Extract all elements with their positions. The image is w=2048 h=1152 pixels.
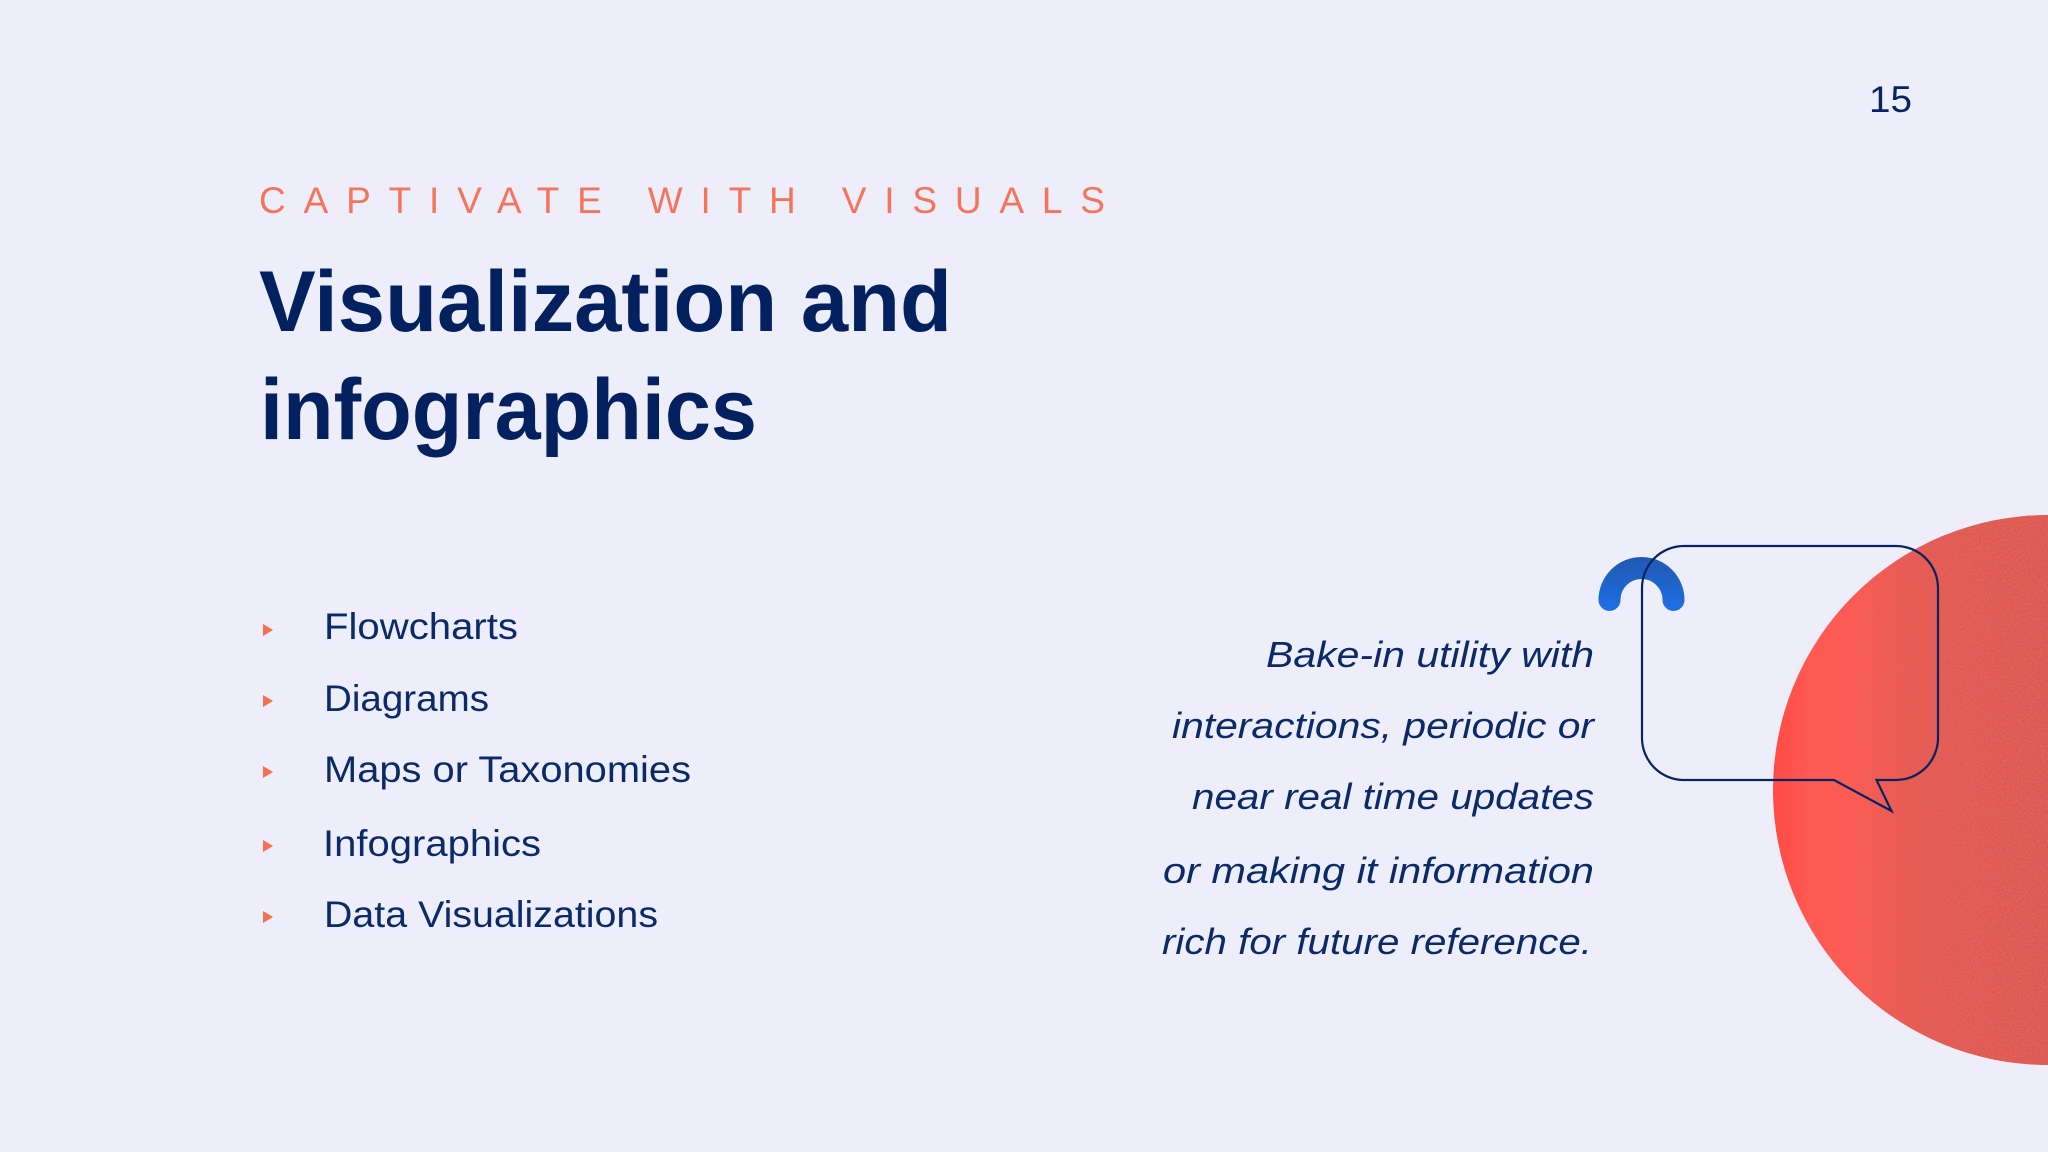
list item: diagrams: Diagrams [324,678,489,719]
italic quote text: near real time updates [1192,776,1594,817]
eyebrow: captivate with visuals: CAPTIVATE WITH VISUALS [259,180,1105,221]
title: infographics [260,362,757,458]
red gradient circle [1773,515,2048,1065]
italic quote text: rich for future reference. [1162,921,1592,962]
bullet list [263,606,691,935]
title [259,254,952,458]
page number: 15 [1869,79,1912,120]
title: Visualization and [259,254,952,350]
icon: blue arc [1610,568,1674,600]
list item: data visualizations: Data Visualizations [324,894,658,935]
list item: infographics: Infographics [323,823,541,864]
icon: speech bubble outline [1642,546,1938,811]
list item: maps or taxonomies: Maps or Taxonomies [324,749,691,790]
italic quote text: or making it information [1163,850,1594,891]
italic quote text [1162,634,1596,962]
italic quote text: Bake-in utility with [1266,634,1594,675]
italic quote text: interactions, periodic or [1172,705,1596,746]
list item: flowcharts: Flowcharts [324,606,518,647]
